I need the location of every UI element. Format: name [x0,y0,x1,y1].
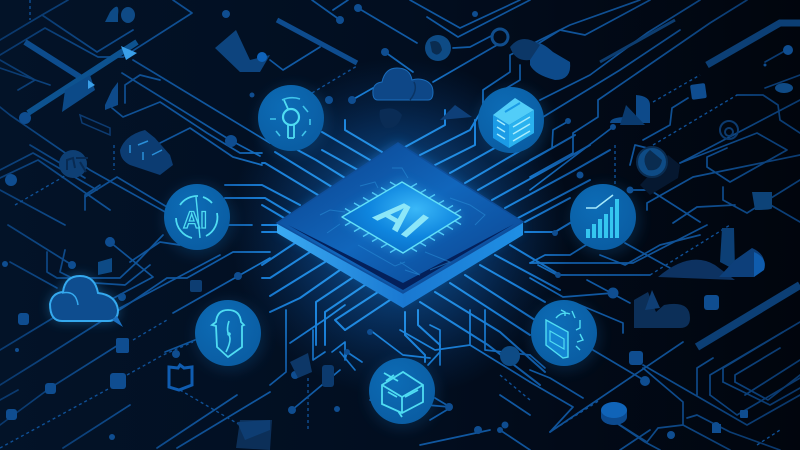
central AI chip [277,143,523,308]
icon: cylinder [601,402,627,425]
icon: octagon badge left [59,150,88,178]
right [530,225,707,263]
chip glow [200,50,600,410]
AI label: AI [364,191,438,246]
icon circle: tablet [529,300,601,372]
left bottom [8,225,72,265]
icon: shield outline [169,365,192,390]
inner die [342,182,461,253]
chip fan traces [225,110,610,385]
chip side right [403,222,523,308]
icon: cloud upper middle [373,68,433,100]
chip top face [277,143,523,293]
icon: arrow highlight upper left [88,46,137,89]
chip side left [277,223,403,308]
icon circle: box [367,358,439,430]
chip faint circuits [320,168,485,275]
thick bus bars [25,20,800,347]
top right [520,0,650,55]
top middle [358,8,417,43]
icon circle: chart [569,184,641,256]
icon circle: bulb [257,85,329,157]
icon circle: AI [163,184,235,256]
inner chip glow [342,182,461,253]
icon: server rack left [120,130,173,175]
icon: glowing cloud [50,276,123,327]
chip pins [345,182,461,252]
icon circle: server [477,87,549,159]
chip inner shadow band [288,224,514,290]
icon circle: shield [194,300,266,372]
bottom middle [270,310,286,385]
icon circle: AI: AI [183,207,207,234]
